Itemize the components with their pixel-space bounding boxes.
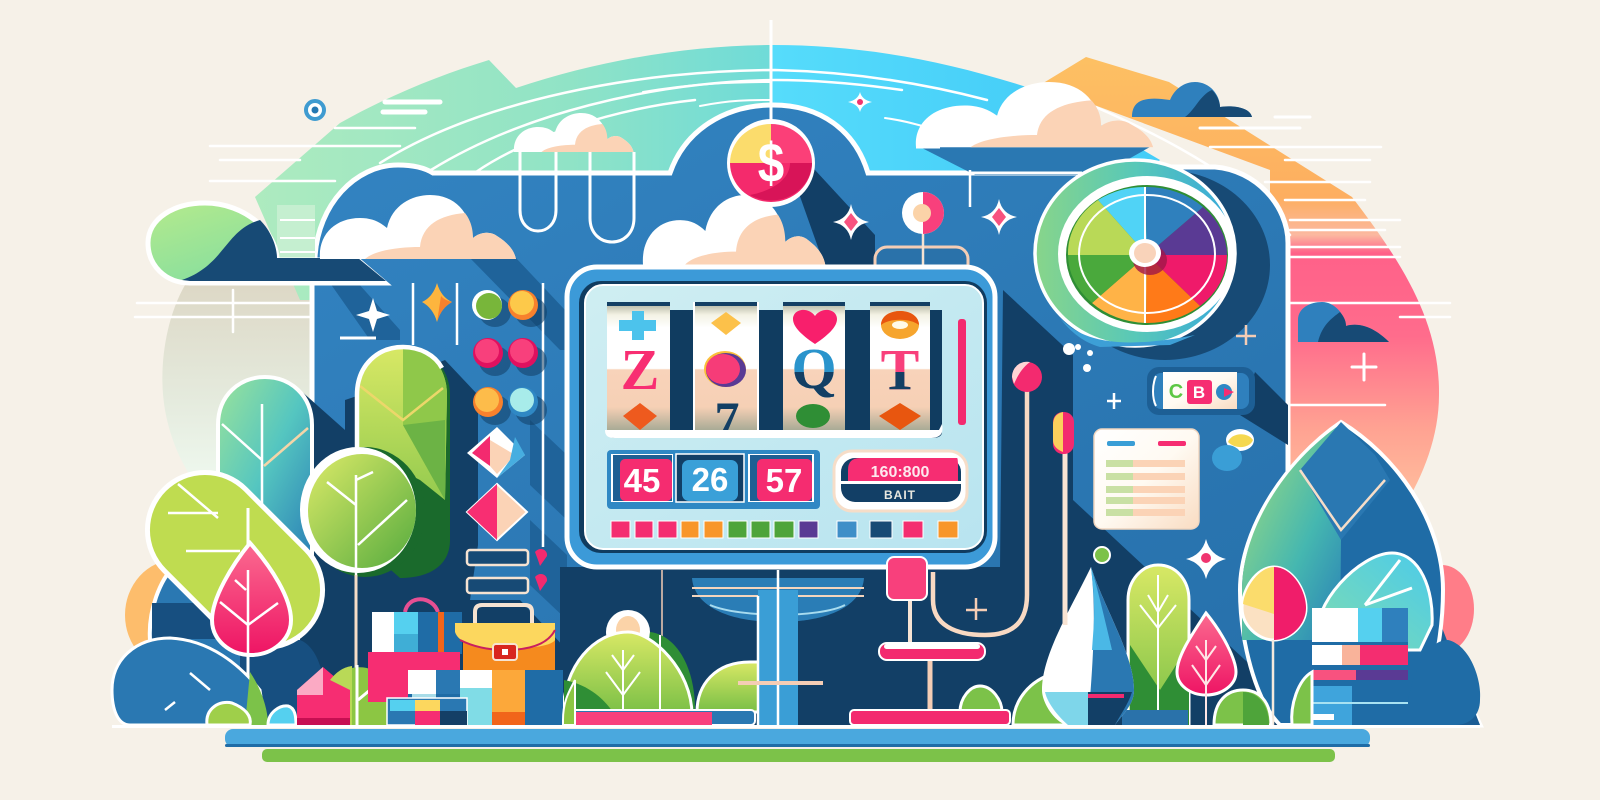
white ring (1058, 176, 1236, 332)
score boxes (607, 450, 820, 509)
menu bars icon (467, 549, 547, 593)
reel 3: Q (791, 336, 837, 401)
display panel: BAIT (884, 488, 916, 502)
white reel lip (605, 424, 942, 438)
slider (958, 319, 966, 425)
lime dome (330, 665, 397, 725)
small bush near seat (960, 686, 1002, 712)
pink slab left (569, 710, 755, 725)
round lime tree (300, 447, 425, 725)
dark mound under leaves (240, 640, 326, 725)
colored buttons (472, 290, 547, 425)
reel 2: 7 (714, 391, 740, 447)
blue base bar (225, 729, 1370, 747)
reel 4: T (881, 337, 919, 402)
small lime pebble (207, 702, 250, 725)
illustration canvas (110, 20, 1484, 762)
cyan leaf (1317, 553, 1432, 650)
tall lime tree (357, 347, 450, 578)
inner frame (579, 281, 987, 553)
pink house gem (297, 667, 350, 725)
inner panel (585, 285, 983, 549)
panel: machine body (312, 105, 1480, 725)
panel: orange to pink dome (1040, 57, 1439, 520)
cloud: large upper right (916, 82, 1153, 147)
reel 4: T (881, 337, 919, 402)
pebbles (1212, 429, 1254, 471)
pink leaf (1177, 613, 1236, 725)
score boxes: 26 (692, 461, 728, 498)
line marker (969, 170, 971, 207)
sky arcs and speed lines (135, 70, 1450, 405)
orange blob behind left blue shape (125, 560, 225, 670)
status tag (1147, 367, 1255, 415)
icon: gear (306, 101, 324, 119)
reel backing (607, 310, 942, 438)
blue band in left shape (152, 603, 242, 639)
cloud: blue on pink (1298, 302, 1389, 342)
reel 1: Z (621, 337, 659, 402)
status tag: B (1193, 383, 1205, 402)
display panel: 160:800 (871, 464, 929, 481)
wedges (1068, 187, 1227, 323)
diamond icons (467, 427, 527, 540)
cloud: left on body (320, 195, 516, 259)
reel 3 (783, 302, 845, 430)
gift bag (372, 599, 462, 654)
cloud: small top (514, 113, 634, 152)
briefcase (455, 605, 555, 670)
white body top line (868, 147, 1082, 173)
pink leaf left (212, 508, 291, 725)
cone (1042, 567, 1134, 725)
small cyan pebble (268, 706, 296, 725)
screen frame (567, 267, 995, 567)
reel 3: Q (791, 336, 837, 401)
roulette wheel (1035, 160, 1236, 347)
cloud: above screen (643, 195, 825, 265)
lever two (1053, 412, 1074, 625)
pink slab right (850, 710, 1010, 725)
dark blob bottom right (1405, 640, 1480, 725)
small stack (387, 698, 467, 725)
lime bush left of cone (1013, 673, 1075, 725)
plus signs (966, 325, 1256, 620)
green strip bush by books (1292, 672, 1312, 725)
coin with dollar: $ (758, 132, 784, 195)
coin with dollar (727, 20, 815, 207)
big leaf tree right (1240, 422, 1443, 725)
small bush near pedestal (697, 662, 780, 712)
blue shape left (150, 565, 290, 690)
pink seat button (879, 557, 985, 725)
outer ring (1035, 160, 1235, 346)
lime bush right of stack (563, 680, 575, 725)
small green ball (1094, 547, 1110, 563)
body shadows (300, 140, 1480, 725)
note card (1094, 429, 1199, 529)
score boxes: 45 (624, 462, 660, 499)
pedestal stand (692, 570, 864, 725)
blue mound bottom left (112, 638, 268, 725)
panel: pale left sky (162, 285, 320, 520)
lever one with pipe (933, 362, 1042, 635)
sparkles on body (340, 92, 1226, 579)
display panel (834, 451, 967, 511)
hub (1129, 239, 1167, 275)
reel 4 (870, 302, 930, 430)
slanted lime capsule (120, 445, 350, 675)
bush group below machine left (563, 570, 695, 715)
knob and handle on top of machine (875, 192, 968, 277)
dark inner rim (1066, 185, 1228, 325)
ring lower band (1060, 318, 1195, 347)
pink box (368, 652, 460, 702)
status tag: C (1169, 381, 1183, 403)
tulip (1242, 567, 1306, 725)
pink blob on right (1410, 565, 1474, 653)
score boxes: 57 (766, 462, 802, 499)
icon: hanging U loops (433, 152, 670, 242)
small slab by tall tree (1122, 710, 1188, 725)
base white line (112, 725, 1480, 728)
panel: mint to cyan dome (255, 45, 1160, 300)
small bubbles (1063, 343, 1093, 372)
tall green tree right (1128, 565, 1189, 725)
vertical rails left panel (413, 283, 543, 547)
panel: green cloud top left (148, 203, 386, 283)
indicator squares (611, 521, 958, 538)
reel 1 (607, 302, 670, 430)
wheel rings (1079, 187, 1215, 323)
book stack (1312, 608, 1408, 725)
box stack (408, 670, 563, 725)
small lime bush (1214, 690, 1271, 725)
teal tree (218, 377, 312, 560)
panel: slot machine screen (567, 267, 995, 567)
green base bar (262, 749, 1335, 762)
cloud: small blue top right (1132, 82, 1252, 117)
reel 2 (693, 302, 759, 447)
